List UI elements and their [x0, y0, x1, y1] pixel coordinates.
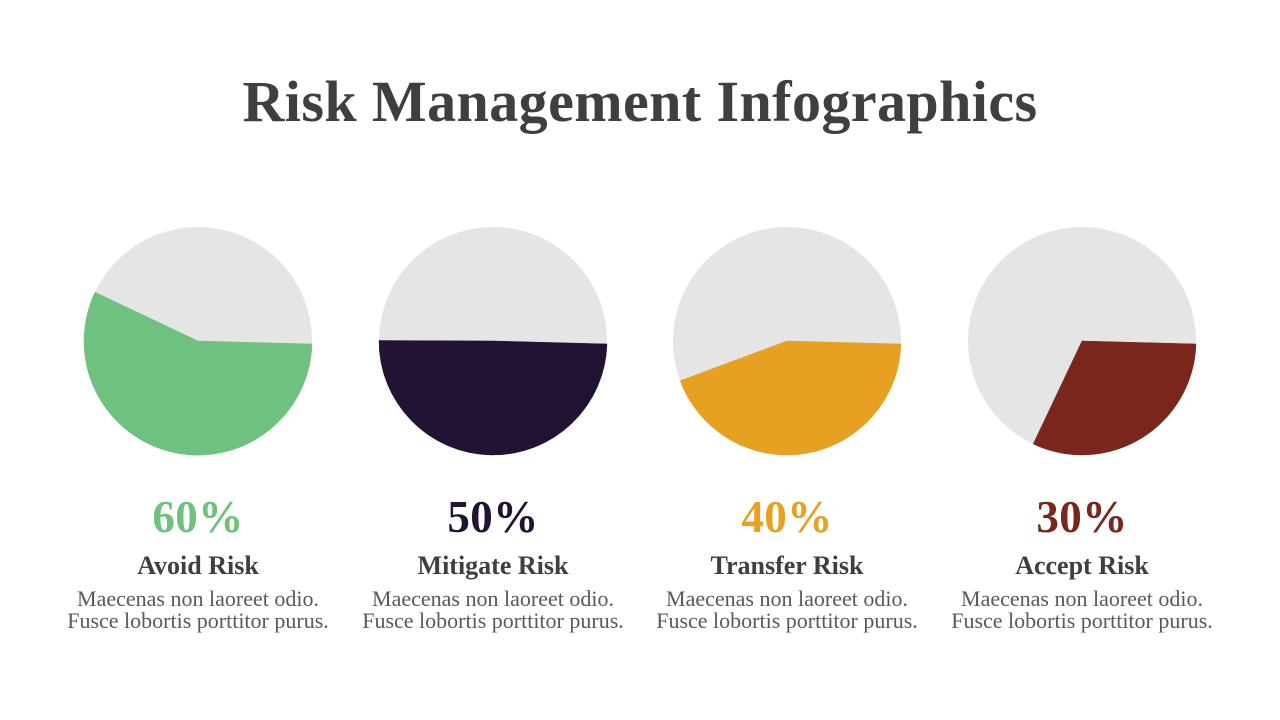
description: Maecenas non laoreet odio.: [372, 586, 614, 611]
pie: accept risk 30%: [968, 227, 1196, 455]
column: mitigate risk: [362, 492, 624, 633]
column: transfer risk: [656, 492, 918, 633]
description: [362, 586, 624, 633]
title: Risk Management Infographics: [242, 69, 1038, 134]
description: Maecenas non laoreet odio.: [961, 586, 1203, 611]
description: Maecenas non laoreet odio.: [666, 586, 908, 611]
pie: transfer risk 40%: [673, 227, 901, 455]
percentage: 30%: [1036, 492, 1128, 542]
percentage: 40%: [741, 492, 833, 542]
heading: Transfer Risk: [711, 551, 863, 580]
heading: Avoid Risk: [137, 551, 259, 580]
percentage: 50%: [447, 492, 539, 542]
heading: Accept Risk: [1015, 551, 1149, 580]
description: Fusce lobortis porttitor purus.: [67, 608, 329, 633]
description: [656, 586, 918, 633]
column: accept risk: [951, 492, 1213, 633]
description: Fusce lobortis porttitor purus.: [656, 608, 918, 633]
description: Fusce lobortis porttitor purus.: [362, 608, 624, 633]
column: avoid risk: [67, 492, 329, 633]
heading: Mitigate Risk: [418, 551, 568, 580]
description: [67, 586, 329, 633]
percentage: 60%: [152, 492, 244, 542]
description: [951, 586, 1213, 633]
description: Fusce lobortis porttitor purus.: [951, 608, 1213, 633]
description: Maecenas non laoreet odio.: [77, 586, 319, 611]
pie: avoid risk 60%: [84, 227, 312, 455]
pie: mitigate risk 50%: [379, 227, 607, 455]
